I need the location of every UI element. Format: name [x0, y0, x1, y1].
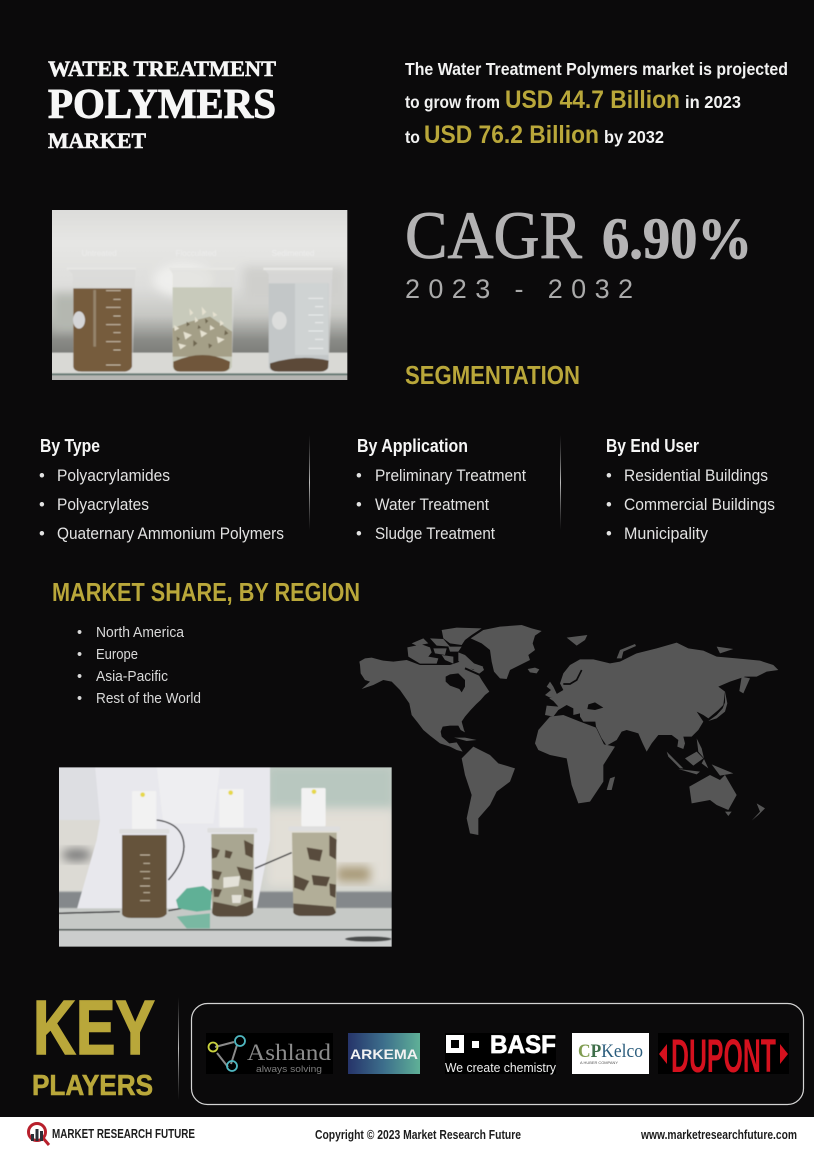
world map: [359, 625, 778, 835]
market projection text: to grow from: [405, 92, 500, 112]
segment column: by type: •: [39, 467, 45, 485]
logo: CP Kelco: CPKelco: [578, 1041, 643, 1062]
region list: •: [77, 691, 82, 707]
key players heading: [32, 985, 155, 1102]
logo: Ashland: always solving: [256, 1064, 322, 1075]
logo: Arkema: ARKEMA: [350, 1046, 418, 1062]
region list: [77, 625, 201, 707]
title: WATER TREATMENT: [48, 56, 276, 81]
title: MARKET: [48, 128, 146, 153]
CAGR figure: [405, 197, 752, 304]
logo: Arkema: [348, 1033, 420, 1074]
segment column: by end user: Residential Buildings: [624, 467, 768, 485]
segment column: by end user: •: [606, 496, 612, 514]
segment column: by application: Sludge Treatment: [375, 525, 495, 543]
segment column: by end user: Commercial Buildings: [624, 496, 775, 514]
title: POLYMERS: [48, 82, 276, 128]
segment column: by end user: •: [606, 525, 612, 543]
beaker 2: [172, 270, 234, 352]
logo: CP Kelco: A HUBER COMPANY: [580, 1060, 618, 1065]
segment column: by application: Preliminary Treatment: [375, 467, 526, 485]
region list: North America: [96, 625, 185, 641]
region list: •: [77, 669, 82, 685]
region list: Europe: [96, 647, 138, 663]
segment column: by type: By Type: [40, 436, 100, 456]
title: [48, 56, 276, 153]
region list: Rest of the World: [96, 691, 201, 707]
logo: BASF: [445, 1031, 556, 1075]
logo: Ashland: Ashland: [247, 1040, 332, 1065]
segment column: by type: [39, 436, 284, 543]
segment column: by type: •: [39, 525, 45, 543]
segment column: by type: Quaternary Ammonium Polymers: [57, 525, 284, 543]
segment column: by end user: By End User: [606, 436, 699, 456]
CAGR figure: 2023 - 2032: [405, 274, 633, 304]
segment column: by type: Polyacrylates: [57, 496, 149, 514]
market projection text: [405, 59, 788, 149]
segment column: by end user: •: [606, 467, 612, 485]
key players heading: PLAYERS: [32, 1070, 153, 1102]
footer brand: MARKET RESEARCH FUTURE: [52, 1127, 195, 1141]
region list: •: [77, 647, 82, 663]
region list: •: [77, 625, 82, 641]
segment column: by type: •: [39, 496, 45, 514]
segment column: by application: By Application: [357, 436, 468, 456]
logo: BASF: BASF: [490, 1031, 556, 1059]
photo: settled water beakers: Flocculated: [176, 249, 217, 258]
CAGR figure: CAGR: [405, 197, 583, 273]
beaker 3: [270, 277, 332, 353]
segment column: by type: Polyacrylamides: [57, 467, 170, 485]
segment column: by end user: Municipality: [624, 525, 709, 543]
market projection text: by 2032: [604, 127, 664, 147]
heading: segmentation: SEGMENTATION: [405, 360, 580, 390]
photo: jar test beakers: [57, 765, 394, 949]
logo: CP Kelco: [572, 1033, 649, 1074]
segment column: by application: [356, 436, 526, 543]
segment column: by application: •: [356, 467, 362, 485]
footer bar: [0, 1117, 814, 1150]
market projection text: to: [405, 127, 420, 147]
beaker 1: [131, 314, 134, 353]
segment column: by application: Water Treatment: [375, 496, 489, 514]
footer copyright: Copyright © 2023 Market Research Future: [315, 1128, 521, 1142]
photo: settled water beakers: Sedimented: [272, 249, 314, 258]
logo: BASF: We create chemistry: [445, 1060, 556, 1075]
CAGR figure: 6.90%: [602, 206, 752, 271]
market projection text: in 2023: [685, 92, 741, 112]
segment column: by end user: [606, 436, 775, 543]
key players panel: [192, 1004, 804, 1104]
photo: settled water beakers: [50, 208, 349, 381]
segment column: by application: •: [356, 496, 362, 514]
heading: market share by region: MARKET SHARE, BY REGION: [52, 577, 360, 607]
key players heading: KEY: [33, 985, 155, 1071]
segment column: by application: •: [356, 525, 362, 543]
market projection text: The Water Treatment Polymers market is projected: [405, 59, 788, 79]
market projection text: USD 76.2 Billion: [424, 121, 599, 149]
market projection text: USD 44.7 Billion: [505, 86, 680, 114]
region list: Asia-Pacific: [96, 669, 168, 685]
footer logo: [28, 1124, 49, 1145]
photo: settled water beakers: Untreated: [82, 249, 117, 258]
logo: Ashland: [206, 1033, 333, 1075]
